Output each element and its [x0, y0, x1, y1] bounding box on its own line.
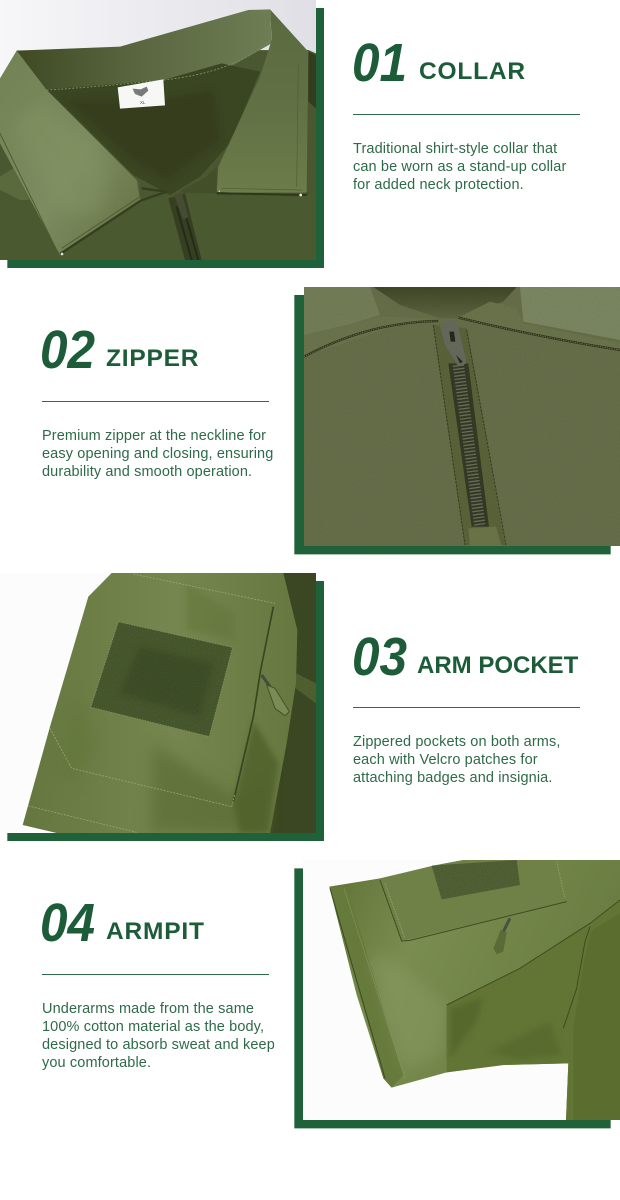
body text: arm pocket: attaching badges and insignia.	[353, 770, 552, 786]
photo: arm pocket	[0, 573, 316, 833]
heading: armpit: ARMPIT	[106, 918, 205, 945]
number 02: 02	[40, 320, 95, 380]
green offset frame	[294, 295, 611, 554]
heading: arm pocket: ARM POCKET	[417, 652, 578, 679]
photo: sleeve and armpit	[303, 858, 620, 1120]
panel: arm pocket photo	[7, 573, 324, 841]
green offset frame	[7, 581, 324, 841]
section: 01 collar text	[352, 33, 580, 193]
panel: armpit photo	[294, 860, 620, 1128]
panel: zipper photo	[294, 287, 620, 554]
body text: collar	[353, 141, 566, 193]
number 01: 01	[352, 33, 407, 93]
body text: zipper	[42, 428, 273, 480]
heading: collar: COLLAR	[419, 58, 526, 85]
icon: zipper pull	[262, 675, 289, 716]
section: 03 arm pocket text	[352, 627, 580, 786]
body text: zipper: easy opening and closing, ensuring	[42, 446, 273, 462]
body text: collar: can be worn as a stand-up collar	[353, 159, 566, 175]
photo: shirt collar	[0, 0, 316, 260]
section: 04 armpit text	[40, 893, 275, 1071]
icon: zipper pull	[493, 918, 510, 954]
heading: zipper: ZIPPER	[106, 345, 199, 372]
section: 02 zipper text	[40, 320, 273, 480]
body text: armpit: you comfortable.	[42, 1055, 151, 1071]
body text: armpit	[42, 1001, 275, 1071]
body text: collar: Traditional shirt-style collar that	[353, 141, 557, 157]
number 04: 04	[40, 893, 95, 953]
photo: zipper closeup	[304, 287, 620, 546]
body text: arm pocket	[353, 734, 561, 786]
icon: size label	[118, 79, 165, 109]
green offset frame	[294, 868, 611, 1128]
body text: arm pocket: Zippered pockets on both arms,	[353, 734, 561, 750]
icon: zipper pull	[440, 318, 467, 367]
green offset frame	[7, 8, 324, 268]
body text: zipper: Premium zipper at the neckline for	[42, 428, 266, 444]
body text: armpit: Underarms made from the same	[42, 1001, 254, 1017]
icon: size label: XL	[140, 100, 146, 105]
body text: armpit: 100% cotton material as the body,	[42, 1019, 264, 1035]
panel: collar photo	[0, 0, 324, 268]
zipper	[168, 193, 202, 260]
zipper teeth	[448, 363, 489, 527]
velcro patch	[432, 860, 520, 900]
body text: armpit: designed to absorb sweat and keep	[42, 1037, 275, 1053]
velcro patch	[87, 620, 237, 740]
number 03: 03	[352, 627, 407, 687]
body text: collar: for added neck protection.	[353, 177, 524, 193]
body text: zipper: durability and smooth operation.	[42, 464, 252, 480]
body text: arm pocket: each with Velcro patches for	[353, 752, 538, 768]
